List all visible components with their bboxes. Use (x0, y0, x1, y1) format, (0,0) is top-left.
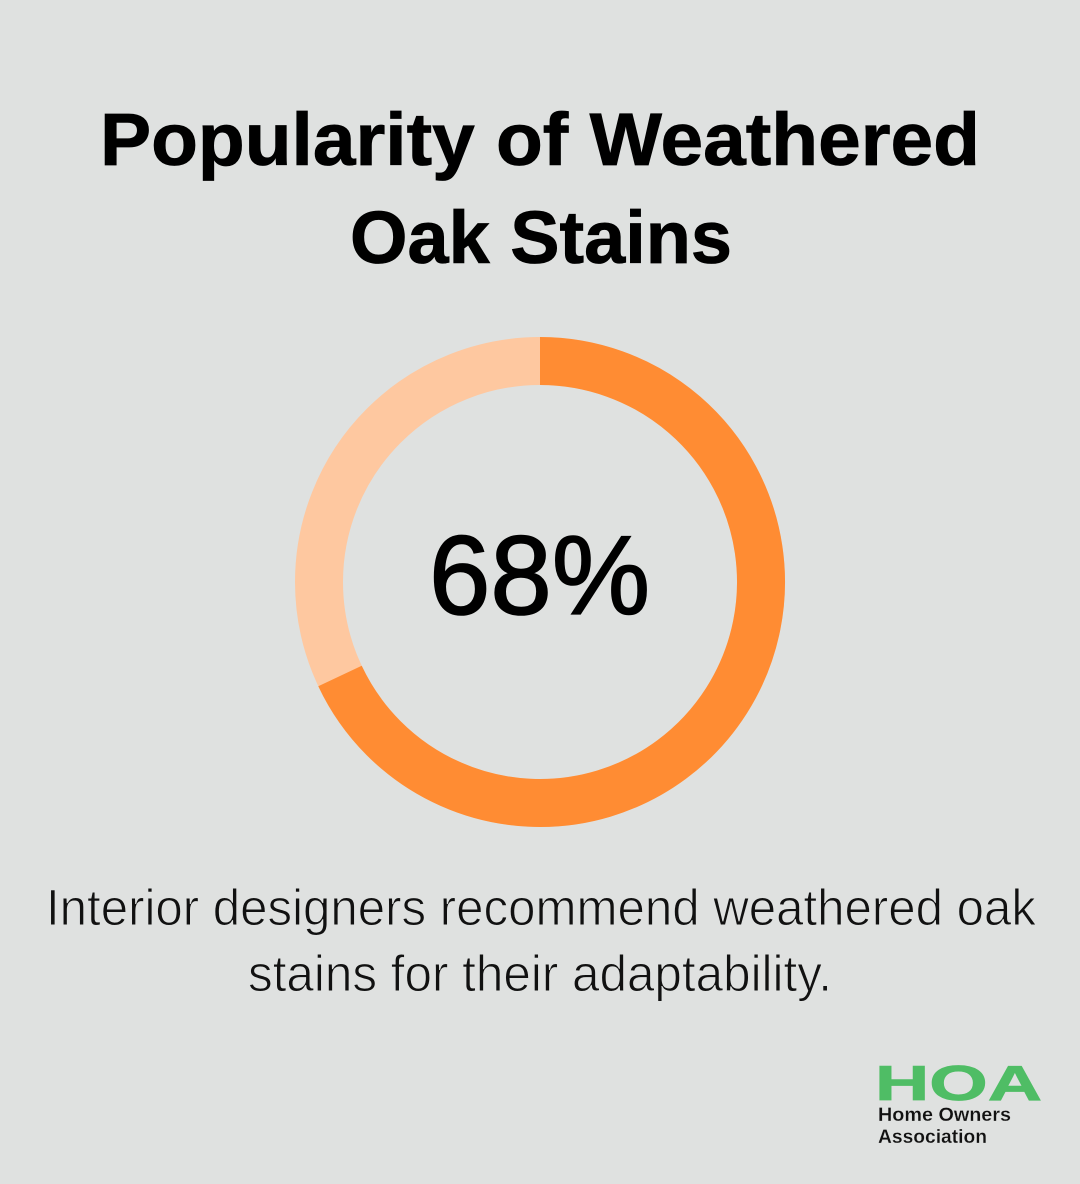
donut value: 68% (429, 513, 650, 638)
logo: Home Owners Association: Home Owners (878, 1105, 1011, 1126)
description text (46, 879, 1036, 1002)
logo: Home Owners Association (875, 1057, 1042, 1148)
title: Popularity of Weathered (100, 98, 980, 181)
logo: Home Owners Association: HOA (875, 1057, 1042, 1111)
title (100, 98, 980, 279)
donut chart: 68% (319, 361, 761, 803)
description text: Interior designers recommend weathered oak (46, 879, 1036, 936)
description text: stains for their adaptability. (248, 945, 832, 1002)
logo: Home Owners Association: Association (878, 1127, 987, 1148)
title: Oak Stains (350, 196, 732, 279)
